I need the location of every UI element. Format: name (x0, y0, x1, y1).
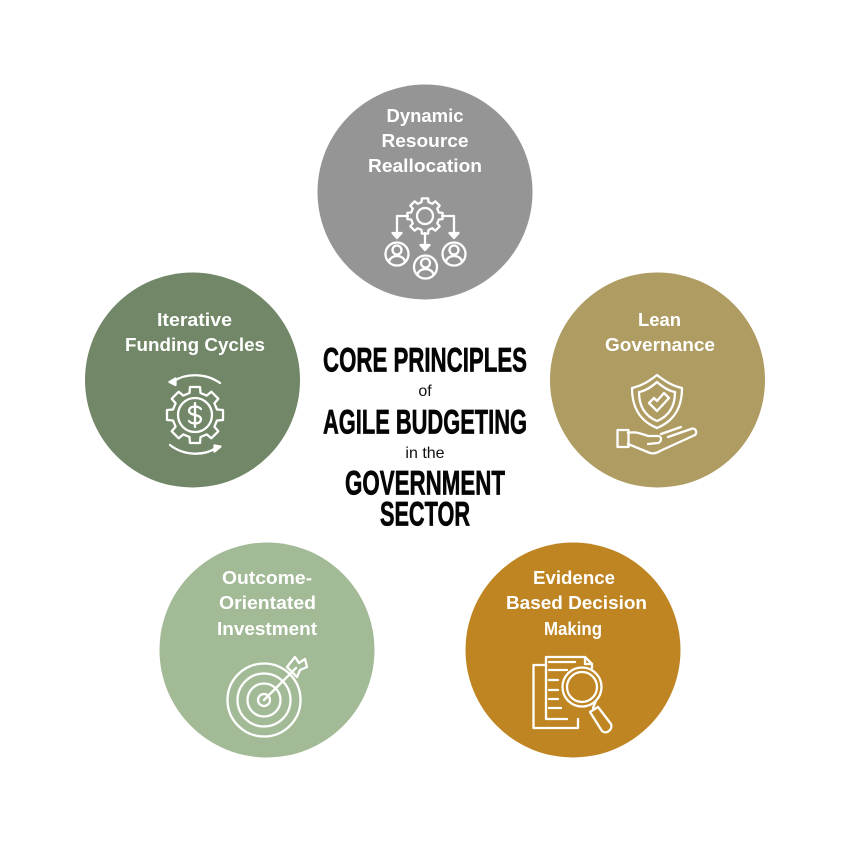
panel: Outcome-Orientated Investment: Investment (217, 619, 317, 639)
panel: Dynamic Resource Reallocation (318, 84, 532, 300)
panel: Outcome-Orientated Investment: Outcome- (222, 568, 312, 588)
central title: in the (405, 445, 445, 462)
icon: dollar gear with cycle arrows (167, 375, 223, 454)
icon: target with arrow (228, 657, 307, 736)
panel: Dynamic Resource Reallocation: Resource (382, 131, 468, 151)
icon: documents and magnifier (534, 657, 611, 732)
panel: Lean Governance: Governance (605, 335, 715, 355)
panel: Outcome-Orientated Investment (160, 542, 374, 758)
icon: hand holding shield (618, 375, 696, 453)
panel: Evidence Based Decision Making: Based Decision (506, 593, 647, 613)
central title: of (418, 383, 432, 400)
panel: Iterative Funding Cycles: Iterative (157, 310, 232, 330)
panel: Iterative Funding Cycles (85, 272, 300, 488)
central title: CORE PRINCIPLES (323, 342, 527, 380)
panel: Lean Governance: Lean (638, 310, 681, 330)
panel: Outcome-Orientated Investment: Orientated (219, 593, 316, 613)
central title (323, 342, 527, 534)
panel: Dynamic Resource Reallocation: Reallocation (368, 156, 482, 176)
icon: gear distributing to people (386, 198, 466, 278)
panel: Iterative Funding Cycles: Funding Cycles (125, 335, 265, 355)
panel: Evidence Based Decision Making: Making (544, 619, 602, 639)
central title: SECTOR (380, 496, 470, 534)
panel: Evidence Based Decision Making: Evidence (533, 568, 615, 588)
panel: Lean Governance (550, 272, 765, 488)
panel: Evidence Based Decision Making (466, 542, 680, 758)
panel: Dynamic Resource Reallocation: Dynamic (386, 106, 464, 126)
central title: AGILE BUDGETING (323, 404, 527, 442)
central title: GOVERNMENT (345, 464, 505, 502)
